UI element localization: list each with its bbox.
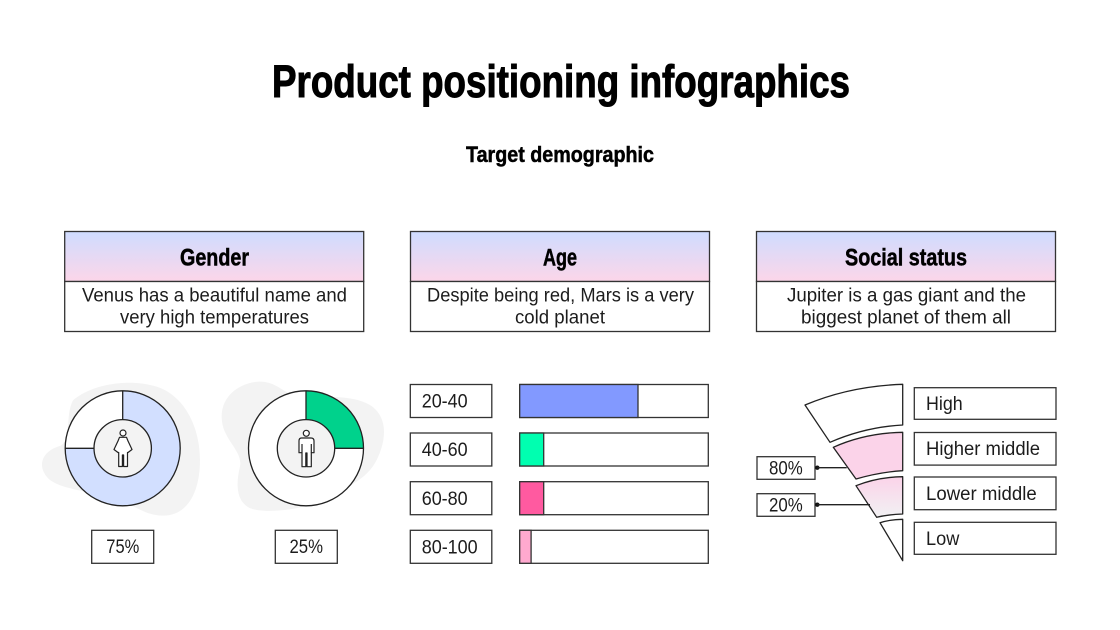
chart: social status funnel: [805, 384, 903, 561]
title: Product positioning infographics: [272, 56, 850, 107]
text: social status description: Jupiter is a gas giant and the: [787, 286, 1026, 306]
label: 75%: 75%: [106, 537, 139, 558]
icon: man: [299, 430, 314, 467]
segment: low: [880, 519, 903, 561]
callout: 80%: 80%: [769, 458, 803, 479]
chart: age 60-80 row: 60-80: [422, 489, 468, 510]
label: higher middle: [914, 432, 1056, 465]
heading: social status: Social status: [845, 244, 967, 272]
label: high: [914, 388, 1056, 419]
text: age description: [427, 286, 694, 328]
label: 75%: [92, 530, 154, 563]
segment: lower middle: [856, 477, 903, 517]
subtitle: Target demographic: [466, 142, 654, 167]
text: age description: cold planet: [515, 308, 606, 328]
icon: woman: [114, 430, 132, 466]
label: lower middle: Lower middle: [926, 484, 1037, 505]
heading: age: Age: [543, 244, 577, 272]
panel: age header: [410, 232, 710, 332]
panel: gender header: [65, 232, 364, 332]
label: high: High: [926, 394, 963, 415]
label: low: Low: [926, 529, 960, 550]
label: higher middle: Higher middle: [926, 439, 1040, 460]
chart: age 40-60 row: [410, 433, 708, 466]
text: social status description: [787, 286, 1026, 328]
label: 25%: 25%: [290, 537, 323, 558]
blob: male backdrop: [222, 382, 384, 511]
text: gender description: very high temperatures: [120, 308, 309, 328]
text: social status description: biggest planet of them all: [801, 308, 1011, 328]
chart: age 20-40 row: [410, 384, 708, 418]
text: gender description: Venus has a beautiful name and: [82, 286, 347, 306]
text: gender description: [82, 286, 347, 328]
chart: age 40-60 row: 40-60: [422, 440, 468, 461]
chart: age 20-40 row: 20-40: [422, 392, 468, 413]
chart: age 60-80 row: [410, 482, 708, 515]
callout: 20%: [757, 494, 870, 516]
chart: age 80-100 row: [410, 530, 708, 563]
blob: female backdrop: [42, 383, 200, 516]
label: lower middle: [914, 477, 1056, 510]
segment: high: [805, 384, 903, 442]
heading: gender: Gender: [180, 244, 249, 272]
label: low: [914, 522, 1056, 554]
callout: 20%: 20%: [769, 495, 803, 516]
panel: social status header: [756, 232, 1056, 332]
label: 25%: [275, 530, 337, 563]
chart: age 80-100 row: 80-100: [422, 537, 478, 558]
chart: male donut 25%: [222, 382, 384, 511]
chart: female donut 75%: [42, 383, 200, 516]
callout: 80%: [757, 457, 847, 479]
segment: higher middle: [833, 432, 903, 479]
text: age description: Despite being red, Mars is a very: [427, 286, 694, 306]
